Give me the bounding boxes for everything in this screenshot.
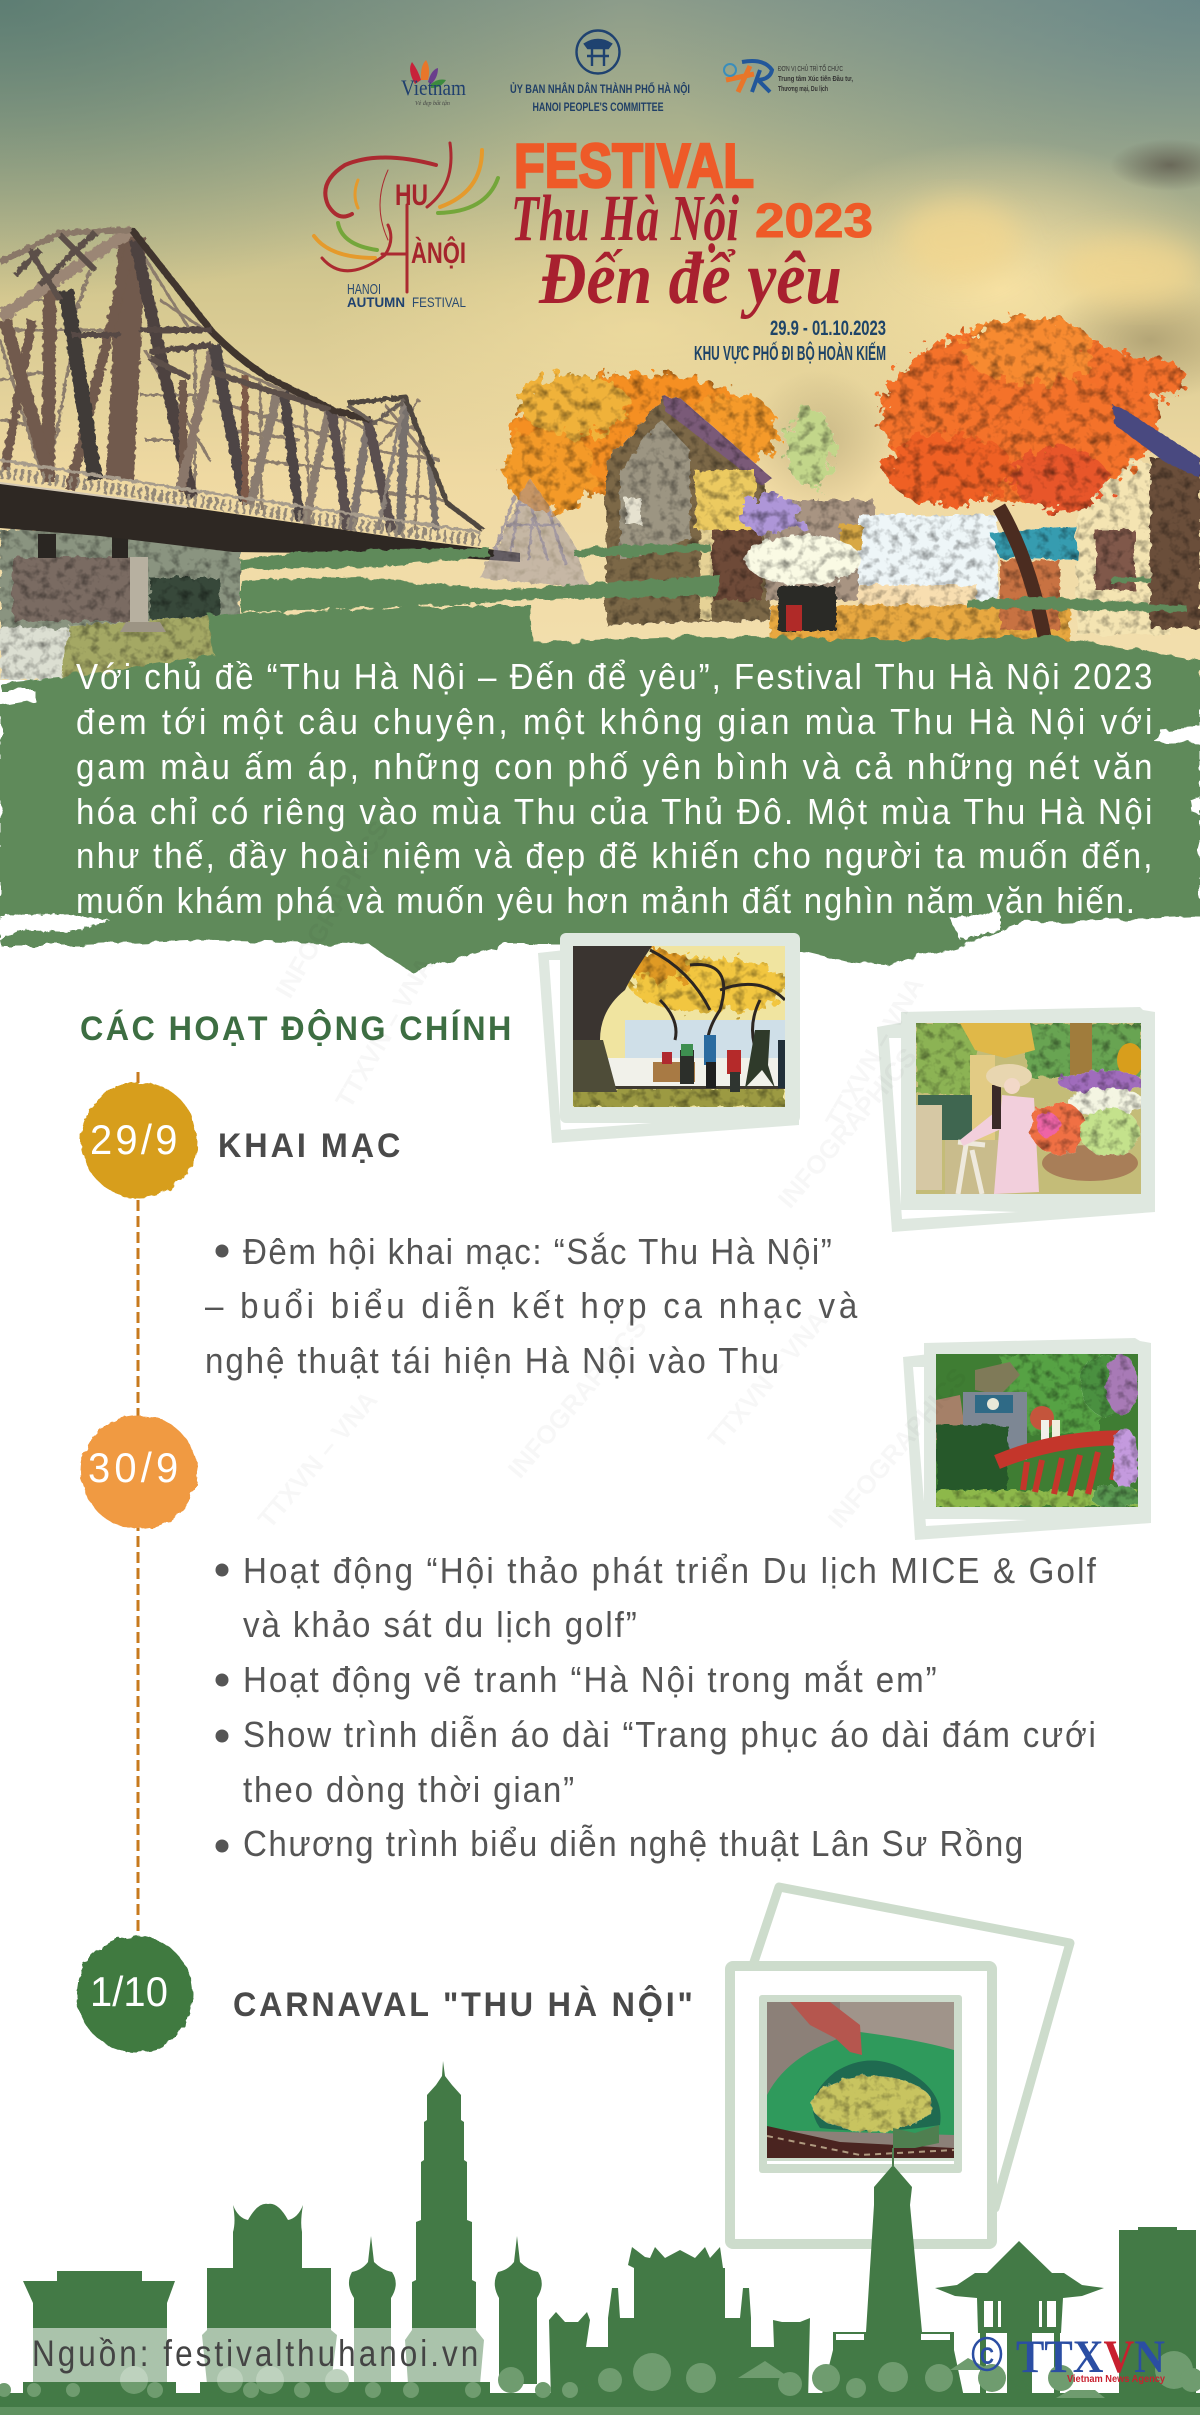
section heading: CÁC HOẠT ĐỘNG CHÍNH (80, 1008, 511, 1048)
bridge deck (0, 483, 520, 562)
Hanoi skyline silhouette (0, 2061, 1200, 2415)
street and light (765, 500, 1070, 645)
photo (573, 946, 790, 1107)
festival title: Đến để yêu (538, 238, 842, 320)
logo: HPA organiser (724, 61, 853, 93)
opening ceremony description: – buổi biểu diễn kết hợp ca nhạc và (205, 1286, 858, 1326)
activities list for 30/9 (216, 1552, 1096, 1864)
tall block (1119, 2227, 1196, 2402)
TTXVN agency mark: TTXVN (1016, 2331, 1165, 2383)
faint watermarks: TTXVN – VNA (819, 971, 930, 1133)
activities list for 30/9: Chương trình biểu diễn nghệ thuật Lân Sư Rồng (243, 1824, 1023, 1864)
heading: opening ceremony: KHAI MẠC (218, 1127, 400, 1165)
festival title: Thu Hà Nội (511, 182, 739, 255)
photo card 2: girl with flower bicycle (877, 1007, 1155, 1232)
festival title: FESTIVAL (514, 132, 754, 201)
logo: Thu Ha Noi lotus: HANOI (347, 281, 381, 298)
flower cart and motorbike (745, 535, 861, 631)
intro paragraph: Với chủ đề “Thu Hà Nội – Đến để yêu”, Festival Thu Hà Nội 2023 (76, 658, 1152, 697)
bullets (216, 1564, 228, 1852)
brush strips over the hero (240, 544, 1187, 612)
upper chords (0, 230, 483, 530)
intro paragraph: như thế, đầy hoài niệm và đẹp đẽ khiến cho người ta muốn đến, (76, 837, 1152, 876)
logo: Thu Ha Noi lotus: ÀNỘI (411, 236, 466, 270)
railing (0, 460, 480, 532)
white strip below photo (767, 2161, 954, 2164)
activities list for 30/9: và khảo sát du lịch golf” (243, 1606, 637, 1645)
hero image: sky, bridge and painted village (0, 0, 1200, 680)
faint watermarks: TTXVN – VNA (702, 1305, 833, 1454)
faint watermarks: INFOGRAPHICS (269, 815, 395, 1003)
copyright sign: C (980, 2343, 994, 2370)
date 29/9 badge: 29/9 (90, 1116, 177, 1163)
painted left autumn tree (505, 373, 777, 512)
background trees and ground beneath the bridge (0, 530, 240, 680)
temple (549, 2247, 810, 2402)
date 1/10 badge: 1/10 (90, 1968, 168, 2015)
painted house (606, 397, 772, 625)
activities list for 30/9: Hoạt động vẽ tranh “Hà Nội trong mắt em” (243, 1660, 937, 1700)
logo: Hanoi People's Committee: ỦY BAN NHÂN DÂN THÀNH PHỐ HÀ NỘI (510, 81, 690, 96)
far bridge beside the painted village (480, 478, 590, 590)
purple blossoms (738, 495, 802, 533)
ground band (0, 2382, 1200, 2415)
date 29/9 badge (81, 1082, 197, 1198)
activities list for 30/9: theo dòng thời gian” (243, 1771, 574, 1810)
photo card 1: autumn tree by the lake (538, 933, 800, 1143)
festival title: 2023 (755, 195, 873, 248)
faint watermarks: INFOGRAPHICS (502, 1312, 653, 1484)
faint watermarks (252, 815, 973, 1534)
activities list for 30/9: Hoạt động “Hội thảo phát triển Du lịch MICE & Golf (243, 1552, 1096, 1591)
logo: Vietnam tourism: Vẻ đẹp bất tận (415, 100, 450, 107)
logo: HPA organiser: Trung tâm Xúc tiến Đầu tư, (778, 74, 853, 83)
green brush band with torn edges (0, 544, 1200, 973)
TTXVN agency mark: Vietnam News Agency (1067, 2374, 1165, 2385)
intro paragraph: hóa chỉ có riêng vào mùa Thu của Thủ Đô. Một mùa Thu Hà Nội (76, 793, 1152, 832)
photo card 3: The Huc bridge (903, 1338, 1151, 1540)
thin lattice (0, 250, 445, 530)
white specks on band edge (0, 796, 1200, 940)
logo: Hanoi People's Committee (510, 30, 690, 114)
festival title: 29.9 - 01.10.2023 (770, 317, 886, 340)
pavilion window openings (836, 2301, 1056, 2340)
opening ceremony description: nghệ thuật tái hiện Hà Nội vào Thu (205, 1342, 779, 1381)
logo: Hanoi People's Committee: HANOI PEOPLE'S COMMITTEE (532, 100, 664, 114)
opening ceremony description (205, 1232, 858, 1381)
photo (767, 2002, 954, 2158)
painted green tree (786, 407, 834, 487)
small tower right (495, 2236, 542, 2384)
heading: carnival: CARNAVAL "THU HÀ NỘI" (233, 1984, 693, 2024)
intro paragraph: đem tới một câu chuyện, một không gian mùa Thu Hà Nội với (76, 703, 1152, 742)
middle frame (730, 1966, 992, 2244)
faint watermarks: TTXVN – VNA (329, 951, 440, 1113)
logo: Vietnam tourism (401, 60, 466, 107)
faint watermarks: INFOGRAPHICS (772, 1042, 923, 1214)
copyright sign (973, 2338, 1001, 2370)
intro paragraph: gam màu ấm áp, những con phố yên bình và cả những nét văn (76, 748, 1152, 787)
far truss (492, 494, 568, 566)
logo: HPA organiser: ĐƠN VỊ CHỦ TRÌ TỔ CHỨC (778, 64, 843, 73)
date 1/10 badge (77, 1936, 193, 2052)
bullet (216, 1244, 228, 1258)
pavilion (935, 2241, 1104, 2402)
opening ceremony description: Đêm hội khai mạc: “Sắc Thu Hà Nội” (243, 1232, 832, 1272)
inner frame (759, 1995, 962, 2173)
right house (990, 450, 1200, 635)
faint watermarks: INFOGRAPHICS (822, 1362, 973, 1534)
intro paragraph: muốn khám phá và muốn yêu hơn mảnh đất nghìn năm văn hiến. (76, 882, 1135, 921)
card frame (538, 933, 800, 1143)
timeline dashed line (136, 1072, 140, 1931)
photo card 4: green rice on lotus leaf (730, 1887, 1070, 2244)
logo: Thu Ha Noi lotus: FESTIVAL (412, 294, 466, 310)
logo: Thu Ha Noi lotus: HU (395, 179, 428, 212)
street trees (0, 2351, 1200, 2398)
activities list for 30/9: Show trình diễn áo dài “Trang phục áo dài đám cưới (243, 1715, 1096, 1755)
rotated back frame (754, 1887, 1070, 2208)
left hall (23, 2271, 175, 2384)
small tower left (349, 2236, 396, 2384)
festival title (511, 132, 886, 365)
event logos at the top (401, 30, 853, 114)
photo (936, 1354, 1139, 1509)
sky (0, 0, 1200, 680)
translucent strip (32, 2328, 490, 2382)
logo: Thu Ha Noi lotus: AUTUMN (347, 294, 405, 310)
tall pagoda (405, 2061, 484, 2384)
date 30/9 badge (81, 1415, 197, 1529)
flag tower (820, 2165, 965, 2402)
logo: HPA organiser: Thương mại, Du lịch (778, 86, 828, 93)
date 30/9 badge: 30/9 (88, 1444, 178, 1491)
logo: Vietnam tourism: Vietnam (401, 75, 466, 100)
gate tower (202, 2204, 337, 2384)
source label with translucent backing: Nguồn: festivalthuhanoi.vn (32, 2334, 478, 2375)
bridge pier (13, 534, 166, 632)
card frame (903, 1338, 1151, 1540)
faint watermarks: TTXVN – VNA (252, 1385, 383, 1534)
card frame (877, 1007, 1155, 1232)
Long Bien bridge truss (0, 230, 566, 565)
intro paragraph (76, 658, 1152, 921)
logo: Thu Ha Noi lotus (314, 143, 498, 310)
rusty posts (5, 236, 436, 535)
main band (0, 606, 1200, 973)
green blob on top of flag tower (892, 2125, 939, 2167)
big red autumn tree (880, 316, 1200, 640)
photo (916, 1023, 1144, 1194)
festival title: KHU VỰC PHỐ ĐI BỘ HOÀN KIẾM (694, 341, 886, 365)
